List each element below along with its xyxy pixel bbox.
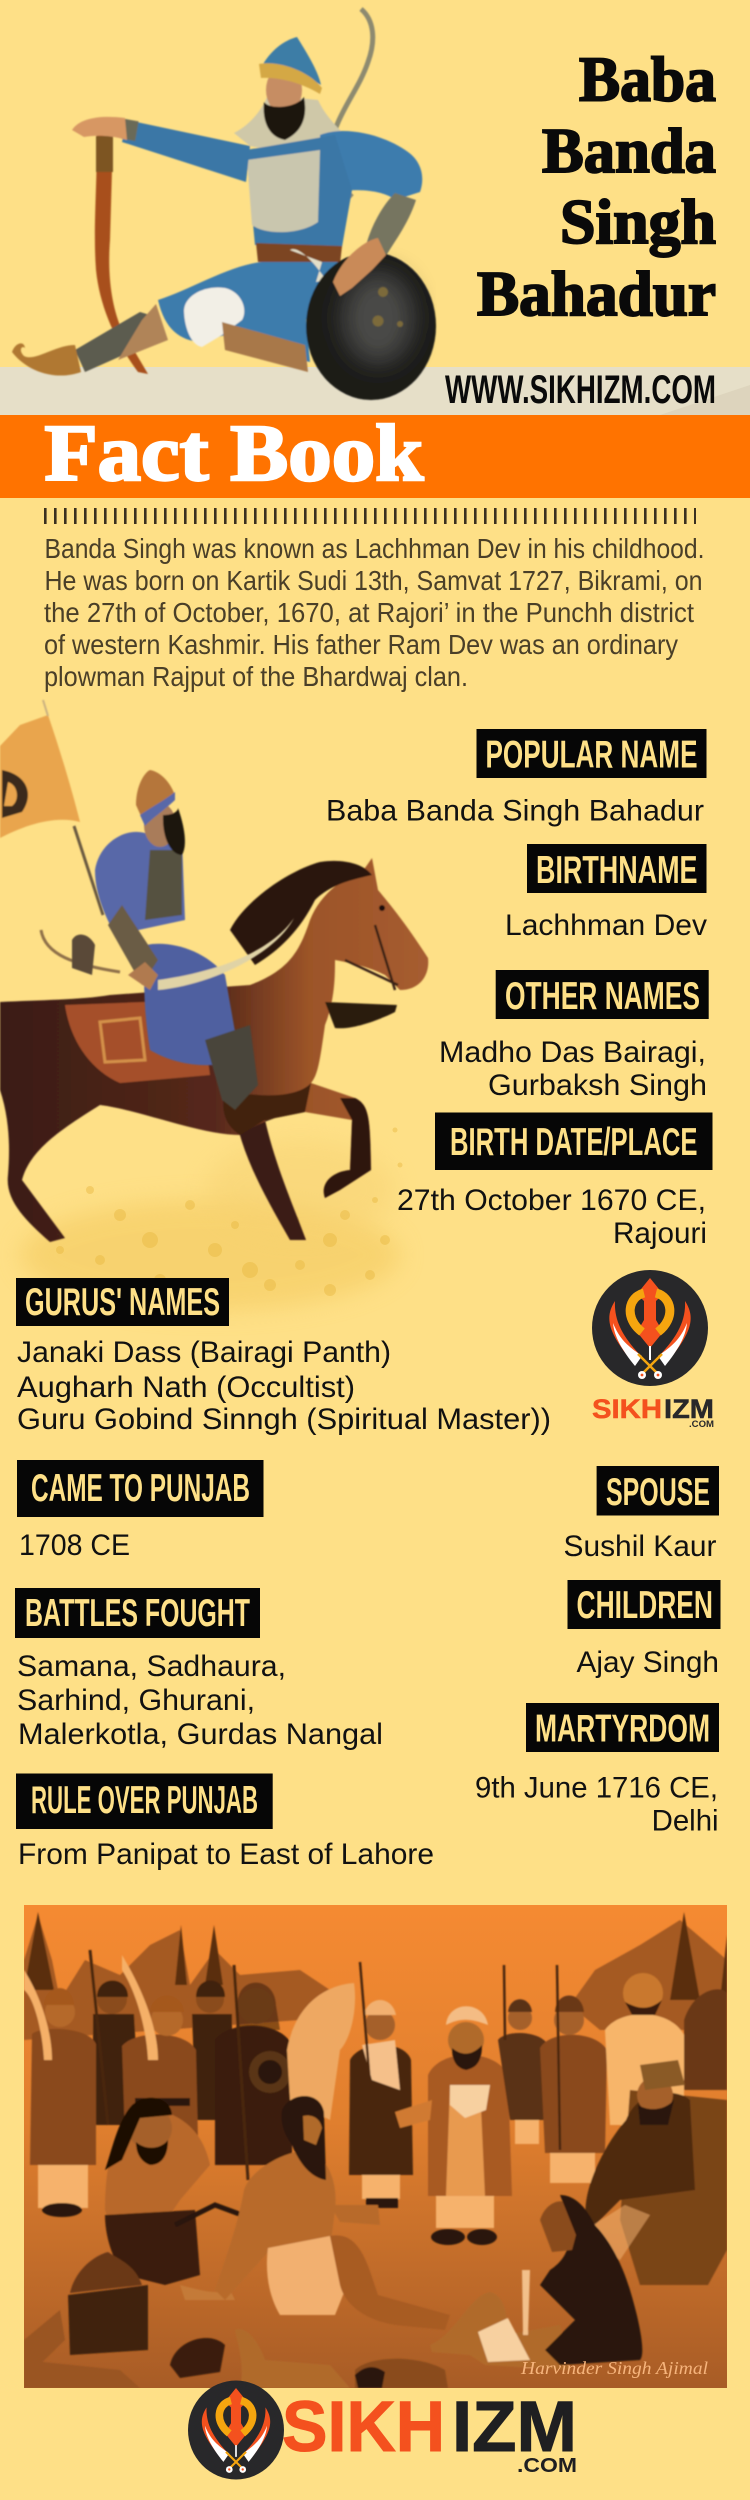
label: birth date and place <box>435 1112 712 1170</box>
illustration: warrior on horseback <box>0 700 428 1310</box>
logo: sikhizm footer: IZM <box>452 2388 577 2467</box>
header band <box>0 367 750 415</box>
value: gurus' names: Augharh Nath (Occultist) <box>17 1371 355 1404</box>
value: martyrdom: 9th June 1716 CE, <box>475 1772 718 1804</box>
victim <box>215 2096 450 2330</box>
value: battles fought: Malerkotla, Gurdas Nangal <box>18 1718 383 1751</box>
value: other names: Gurbaksh Singh <box>488 1069 707 1102</box>
intro paragraph <box>44 533 704 692</box>
value: battles fought <box>17 1650 383 1751</box>
logo: sikhizm badge: SIKH <box>592 1394 662 1424</box>
logo: sikhizm badge: IZM <box>664 1394 714 1424</box>
label: battles fought: BATTLES FOUGHT <box>25 1592 250 1635</box>
value: popular name: Baba Banda Singh Bahadur <box>326 794 704 828</box>
label: gurus' names: GURUS' NAMES <box>25 1281 220 1324</box>
value: birth date and place: 27th October 1670 CE, <box>397 1184 706 1217</box>
background trees <box>24 1912 727 2040</box>
label: came to punjab: CAME TO PUNJAB <box>31 1467 250 1510</box>
label: birthname <box>527 844 706 893</box>
illustration: seated warrior <box>12 9 436 400</box>
value: birth date and place <box>397 1184 707 1250</box>
value: battles fought: Sarhind, Ghurani, <box>17 1684 255 1717</box>
intro paragraph: the 27th of October, 1670, at Rajori’ in the Punchh district <box>44 597 694 628</box>
value: other names <box>439 1036 707 1102</box>
logo: sikhizm badge <box>592 1270 714 1430</box>
value: gurus' names: Guru Gobind Sinngh (Spiritual Master)) <box>17 1403 551 1436</box>
fire pot <box>24 2252 148 2388</box>
value: birth date and place: Rajouri <box>613 1217 707 1250</box>
title: Singh <box>560 187 716 257</box>
label: rule over punjab <box>16 1774 273 1829</box>
soldiers group <box>24 1950 292 2217</box>
intro paragraph: of western Kashmir. His father Ram Dev was an ordinary <box>44 629 678 660</box>
intro paragraph: plowman Rajput of the Bhardwaj clan. <box>44 661 468 692</box>
title: Bahadur <box>477 259 716 329</box>
central cleric <box>395 2006 512 2245</box>
value: children: Ajay Singh <box>576 1646 719 1679</box>
value: other names: Madho Das Bairagi, <box>439 1036 706 1069</box>
painting: martyrdom scene <box>24 1905 727 2388</box>
rider <box>95 770 294 1110</box>
label: battles fought <box>15 1588 260 1638</box>
value: martyrdom <box>475 1772 719 1838</box>
logo: sikhizm footer: .COM <box>517 2455 577 2477</box>
title <box>477 44 716 329</box>
attendant <box>349 1962 413 2208</box>
logo: sikhizm badge: .COM <box>689 1419 714 1430</box>
fact book banner <box>0 408 750 498</box>
label: spouse <box>597 1466 719 1516</box>
horse <box>287 1983 355 2120</box>
label: rule over punjab: RULE OVER PUNJAB <box>31 1779 258 1822</box>
label: gurus' names <box>16 1278 229 1326</box>
value: gurus' names: Janaki Dass (Bairagi Panth) <box>17 1336 391 1369</box>
value: martyrdom: Delhi <box>652 1804 719 1838</box>
torturer <box>105 2098 242 2300</box>
value: gurus' names <box>17 1336 551 1436</box>
signature: Harvinder Singh Ajimal <box>520 2358 708 2378</box>
seated ruler <box>585 2060 727 2285</box>
logo: sikhizm footer: SIKH <box>282 2388 445 2467</box>
right soldiers <box>498 1965 727 2183</box>
executioner and child <box>430 2195 642 2370</box>
fallen bodies <box>169 2336 448 2388</box>
value: spouse: Sushil Kaur <box>564 1530 717 1563</box>
value: came to punjab: 1708 CE <box>19 1529 130 1562</box>
title: Baba <box>579 44 716 114</box>
horse <box>0 858 428 1242</box>
value: birthname: Lachhman Dev <box>505 909 707 942</box>
value: rule over punjab: From Panipat to East of Lahore <box>18 1838 434 1871</box>
value: battles fought: Samana, Sadhaura, <box>17 1650 286 1683</box>
gold dust <box>20 1128 402 1310</box>
flag <box>0 700 103 915</box>
fact book banner: Fact Book <box>44 408 424 498</box>
label: came to punjab <box>17 1460 264 1517</box>
logo: sikhizm footer <box>188 2380 577 2480</box>
title: Banda <box>542 116 716 186</box>
